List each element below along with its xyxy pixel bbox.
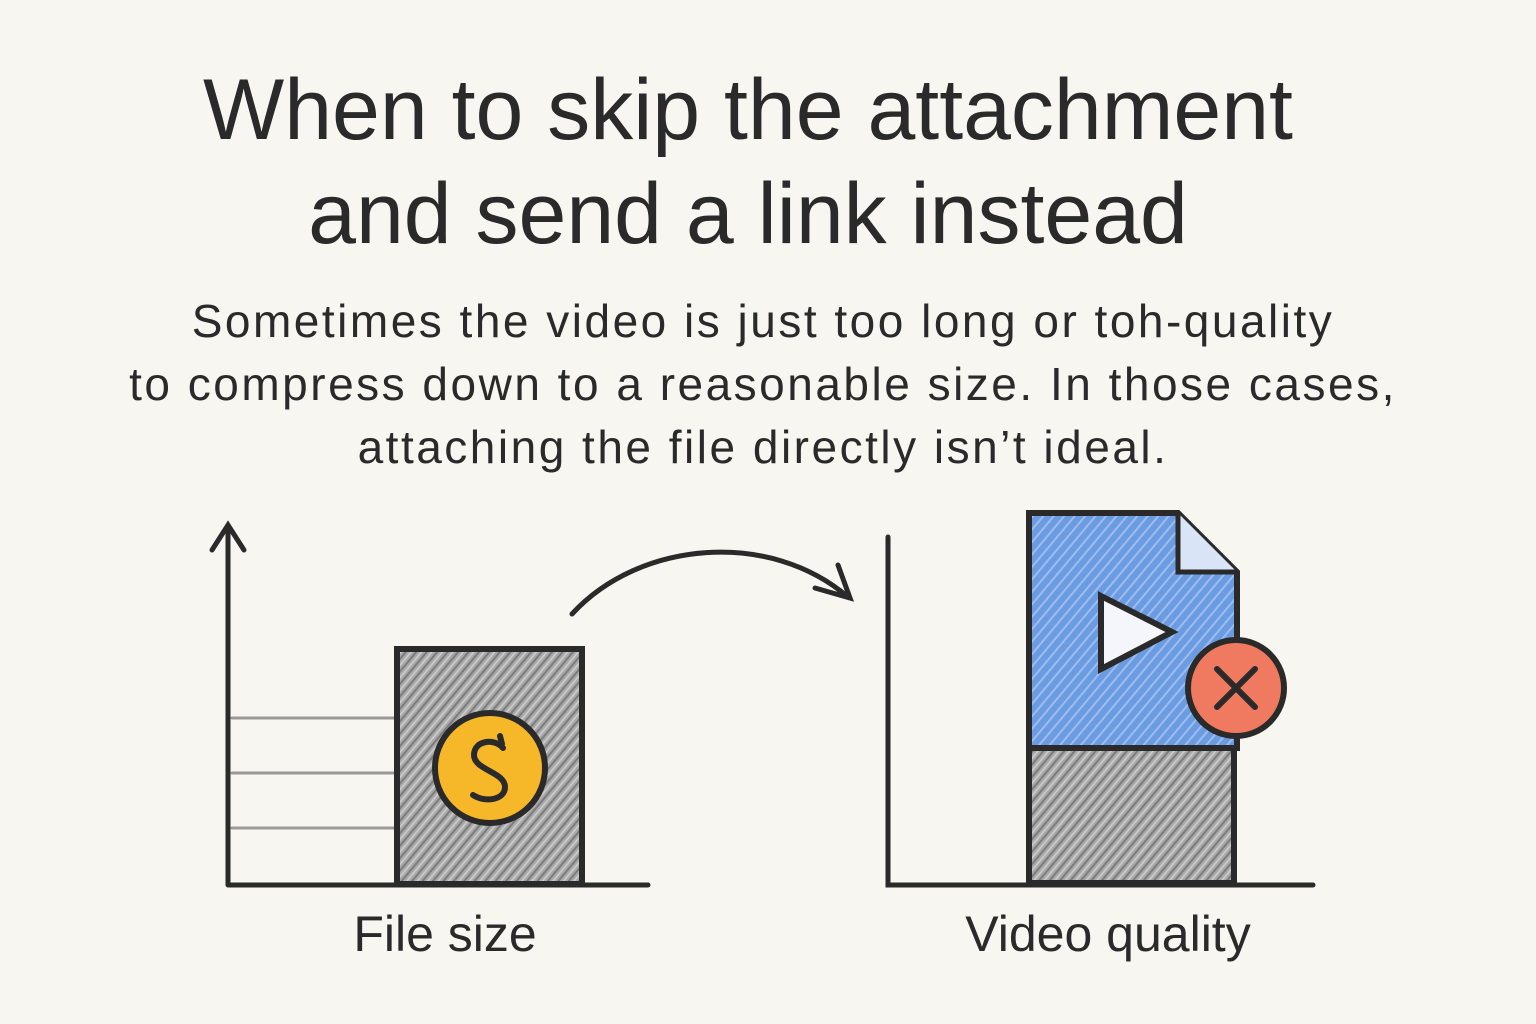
icon: video file bbox=[1029, 513, 1237, 748]
subtitle text: attaching the file directly isn’t ideal. bbox=[358, 421, 1168, 473]
arrow bbox=[572, 552, 850, 614]
label: video quality: Video quality bbox=[965, 906, 1251, 962]
title bbox=[203, 62, 1293, 262]
title: When to skip the attachment bbox=[203, 62, 1293, 158]
chart: file size bbox=[212, 525, 648, 885]
label: file size: File size bbox=[353, 906, 537, 962]
subtitle text: Sometimes the video is just too long or toh-quality bbox=[192, 295, 1334, 347]
subtitle text bbox=[129, 295, 1397, 473]
title: and send a link instead bbox=[308, 166, 1188, 262]
chart: video quality bbox=[888, 513, 1313, 885]
icon: error bbox=[1188, 640, 1284, 736]
icon: coin bbox=[435, 713, 545, 823]
subtitle text: to compress down to a reasonable size. In those cases, bbox=[129, 358, 1397, 410]
